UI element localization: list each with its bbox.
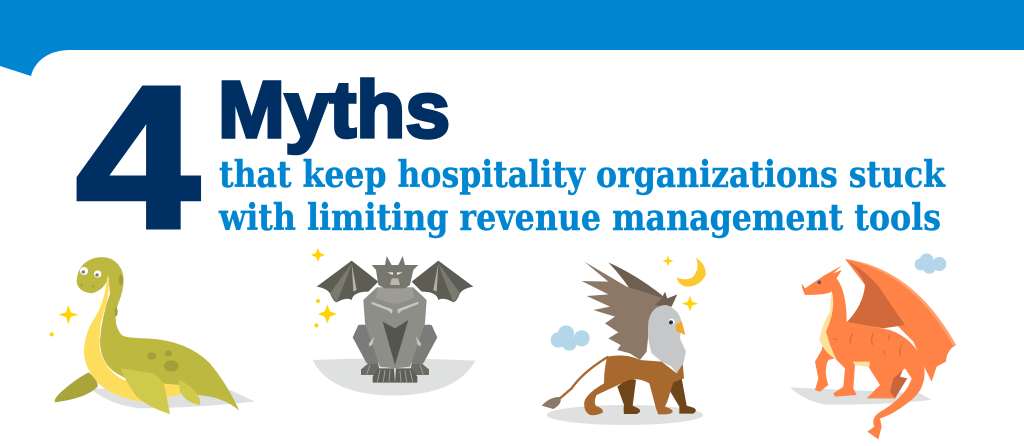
sparkle lower xyxy=(318,305,337,323)
wing xyxy=(845,259,956,382)
right wing xyxy=(412,261,473,302)
eye xyxy=(669,319,675,325)
left wing xyxy=(317,261,378,302)
wing membrane xyxy=(847,262,905,328)
subtitle line 2: with limiting revenue management tools xyxy=(218,197,941,239)
arm highlights xyxy=(369,302,421,347)
cloud xyxy=(551,325,590,351)
body and neck xyxy=(77,257,239,411)
shadow xyxy=(547,405,703,425)
rear flipper xyxy=(178,379,200,405)
body and legs xyxy=(584,356,684,415)
sparkle xyxy=(59,305,78,324)
scales xyxy=(833,333,902,357)
moon xyxy=(677,258,706,287)
far leg xyxy=(885,362,907,398)
illustration: dragon xyxy=(790,253,956,439)
illustration: griffin xyxy=(542,255,706,425)
dot xyxy=(50,332,54,336)
right haunch xyxy=(412,325,437,363)
eye xyxy=(818,281,821,284)
far legs xyxy=(617,378,696,414)
subtitle line 1: that keep hospitality organizations stuck xyxy=(219,154,946,196)
shadow xyxy=(90,388,255,408)
sparkle small xyxy=(662,255,674,267)
sparkle dots xyxy=(314,299,320,327)
chest xyxy=(376,287,414,304)
head xyxy=(372,256,418,288)
front wing xyxy=(582,262,663,360)
eyes and nose xyxy=(387,272,403,285)
tail tuft xyxy=(542,397,561,409)
belly xyxy=(819,290,837,360)
torso xyxy=(363,287,427,368)
lower belly strip xyxy=(853,362,870,367)
crest xyxy=(655,292,677,307)
big number 4: 4 xyxy=(76,44,199,270)
belly xyxy=(84,275,180,402)
shadow xyxy=(790,387,932,405)
spots xyxy=(80,275,179,372)
back wing xyxy=(608,262,670,312)
illustration: gargoyle xyxy=(311,248,475,396)
center dark V xyxy=(383,320,408,365)
sparkle large xyxy=(682,296,698,312)
head xyxy=(648,305,686,373)
front feet xyxy=(373,368,417,383)
left haunch xyxy=(353,325,378,363)
front flipper xyxy=(121,368,170,414)
blue header banner xyxy=(0,0,1024,76)
shadow xyxy=(313,358,475,396)
wing edge highlight xyxy=(845,259,956,345)
title: Myths: Myths xyxy=(218,65,450,154)
illustration: sea monster xyxy=(50,257,255,414)
body xyxy=(802,266,925,439)
eyes xyxy=(80,267,101,278)
sparkle top xyxy=(311,248,325,262)
tail xyxy=(560,357,608,398)
toe stripes xyxy=(367,365,423,382)
cloud xyxy=(915,253,946,274)
back feet xyxy=(361,363,429,375)
back flipper xyxy=(55,372,98,402)
beak xyxy=(676,321,685,335)
